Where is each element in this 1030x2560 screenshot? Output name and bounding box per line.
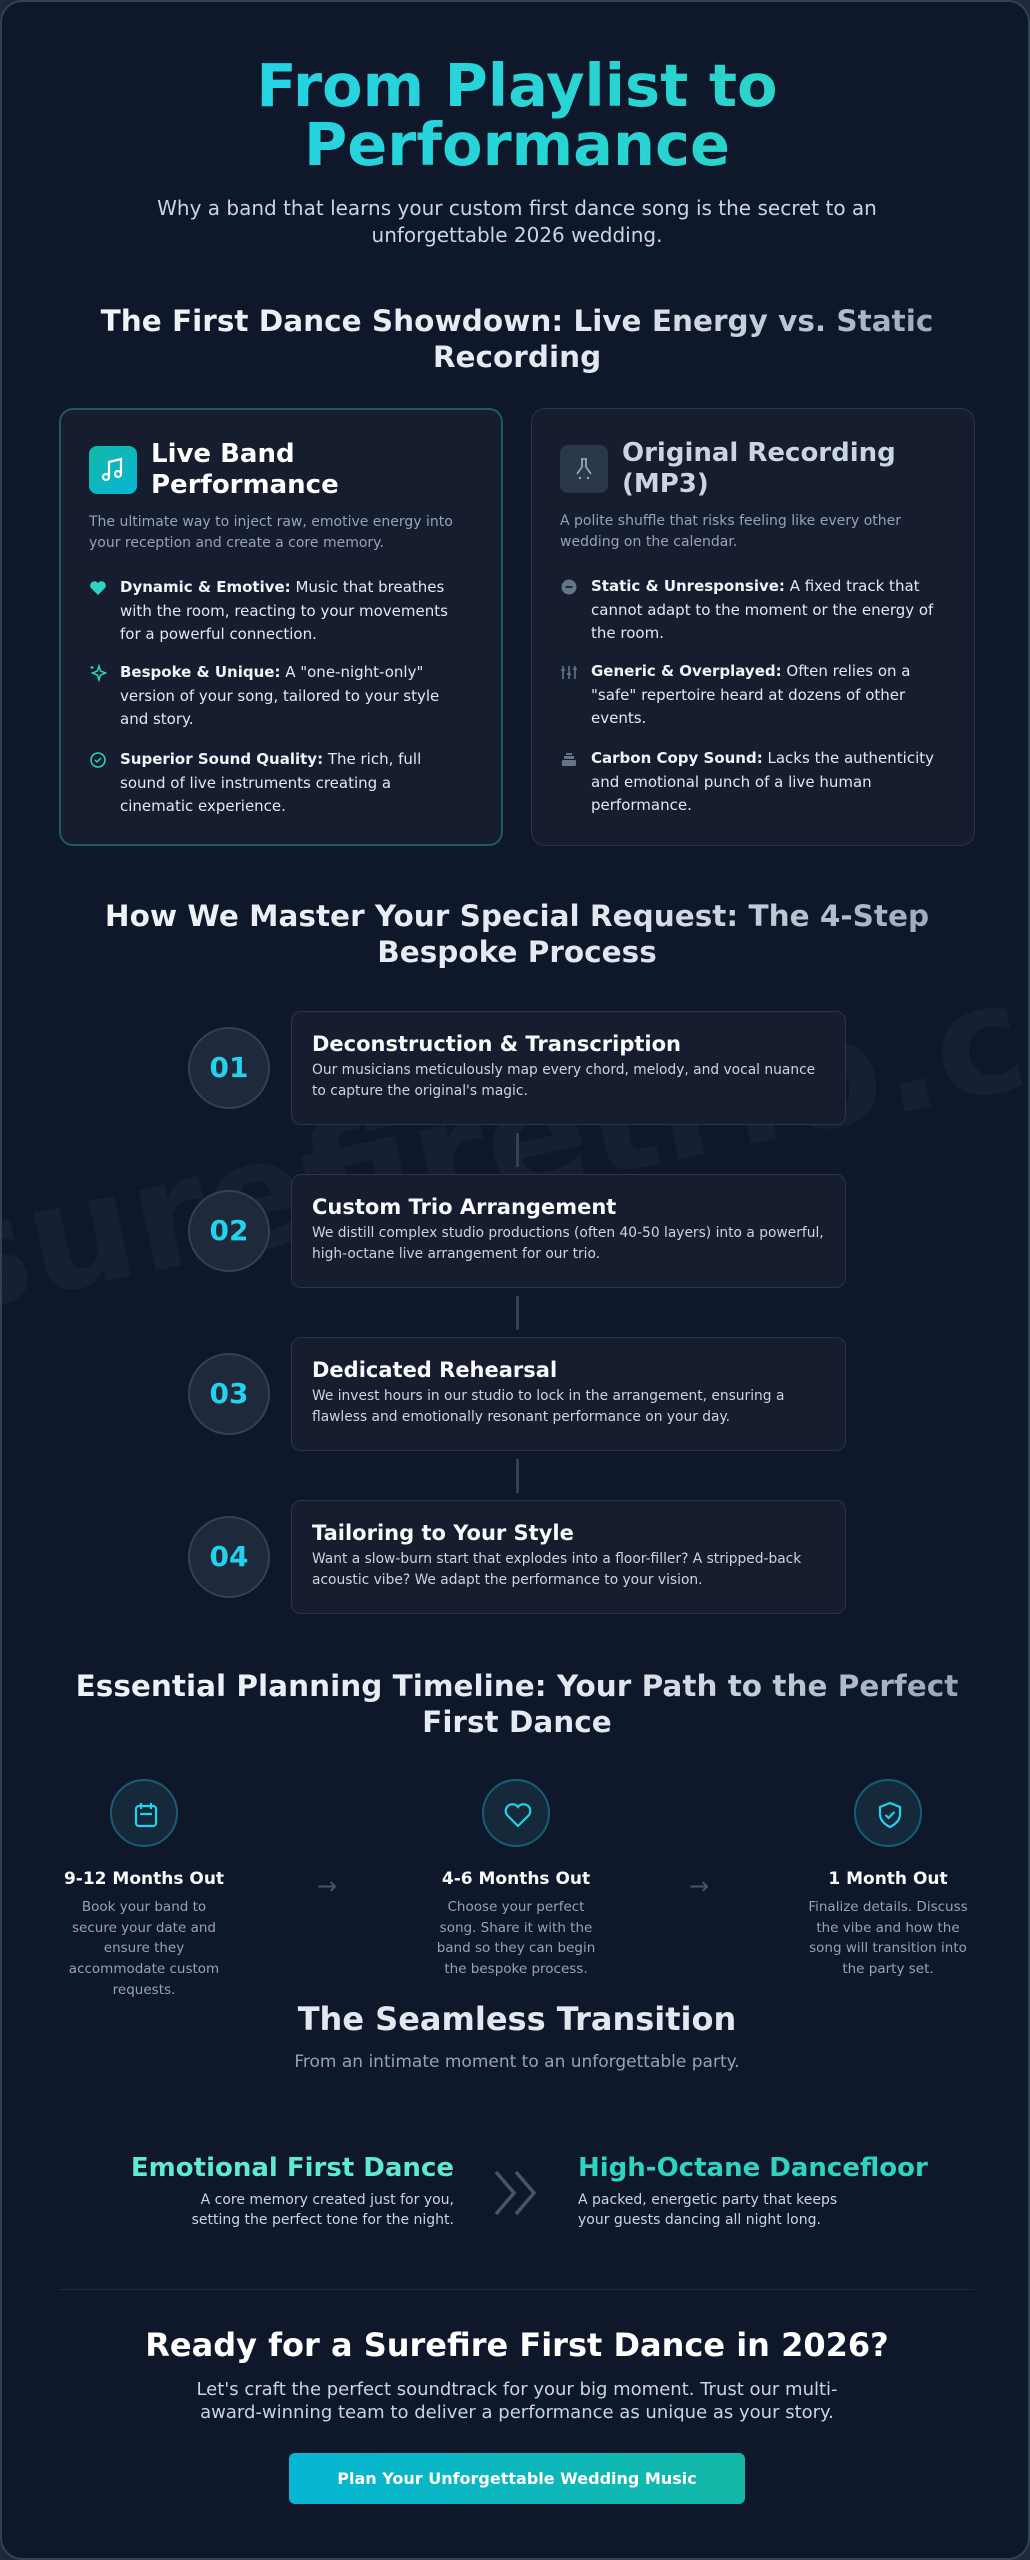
- icon: chevrons: [494, 2171, 536, 2215]
- bullet: dynamic: Dynamic & Emotive: Music that breathes with the room, reacting to your movements for a powerful connection.: [120, 578, 448, 643]
- step card: We distill complex studio productions (often 40-50 layers) into a powerful, high-octane live arrangement for our trio.: [312, 1225, 824, 1262]
- step card: [291, 1337, 846, 1451]
- timeline: 1 month: 1 Month Out: [828, 1869, 948, 1889]
- transition: emotional: [131, 2153, 454, 2228]
- panel: live band: [59, 408, 503, 846]
- timeline: 1 month: [808, 1779, 968, 1977]
- step card: [291, 1500, 846, 1614]
- subtitle: Why a band that learns your custom first dance song is the secret to an unforgettable 2026 wedding.: [157, 196, 877, 247]
- step 02: [188, 1174, 846, 1288]
- bullet: carbon copy: Carbon Copy Sound: Lacks the authenticity and emotional punch of a live human performance.: [591, 749, 934, 814]
- step card: Want a slow-burn start that explodes into a floor-filler? A stripped-back acoustic vibe? We adapt the performance to your vision.: [312, 1551, 801, 1588]
- step card: Custom Trio Arrangement: [312, 1195, 616, 1219]
- CTA button: Plan Your Unforgettable Wedding Music: [337, 2469, 697, 2488]
- step card: Tailoring to Your Style: [312, 1521, 574, 1545]
- step 01: [188, 1011, 846, 1125]
- bullet: generic: Generic & Overplayed: Often relies on a "safe" repertoire heard at dozens of other events.: [591, 662, 910, 727]
- subheading: From an intimate moment to an unforgettable party.: [294, 2052, 740, 2072]
- timeline: 4-6 months: [437, 1779, 595, 1977]
- transition: emotional: setting the perfect tone for the night.: [192, 2212, 454, 2228]
- number badge: [188, 1190, 270, 1272]
- step 04: [188, 1500, 846, 1614]
- step card: [291, 1174, 846, 1288]
- number badge: [188, 1353, 270, 1435]
- panel: original recording: [531, 408, 975, 846]
- CTA text: Let's craft the perfect soundtrack for your big moment. Trust our multi-award-winning team to deliver a performance as unique as your story.: [196, 2379, 838, 2423]
- title: Performance: [304, 110, 730, 179]
- card description: The ultimate way to inject raw, emotive energy into your reception and create a core memory.: [89, 514, 453, 551]
- step card: Deconstruction & Transcription: [312, 1032, 681, 1056]
- timeline: 4-6 months: 4-6 Months Out: [442, 1869, 590, 1889]
- step card: Our musicians meticulously map every chord, melody, and vocal nuance to capture the original's magic.: [312, 1062, 815, 1099]
- icon: recording: [560, 445, 608, 493]
- icon: calendar: [110, 1779, 178, 1847]
- timeline: 9-12 months: Book your band to secure your date and ensure they accommodate custom requests.: [69, 1899, 219, 1998]
- card title: Original Recording (MP3): [622, 438, 896, 499]
- number badge: 04: [210, 1540, 248, 1573]
- step card: Dedicated Rehearsal: [312, 1358, 557, 1382]
- CTA heading: Ready for a Surefire First Dance in 2026?: [145, 2326, 889, 2364]
- transition: dancefloor: your guests dancing all night long.: [578, 2212, 821, 2228]
- number badge: 03: [210, 1377, 248, 1410]
- card title: Live Band Performance: [151, 439, 339, 500]
- number badge: [188, 1516, 270, 1598]
- timeline: 1 month: Finalize details. Discuss the vibe and how the song will transition into the party set.: [808, 1899, 968, 1977]
- heading: seamless transition: The Seamless Transition: [298, 2000, 736, 2038]
- transition: dancefloor: High-Octane Dancefloor: [578, 2153, 928, 2183]
- step card: We invest hours in our studio to lock in the arrangement, ensuring a flawless and emotionally resonant performance on your day.: [312, 1388, 784, 1425]
- icon: heart: [482, 1779, 550, 1847]
- icon: shield: [854, 1779, 922, 1847]
- CTA button: [289, 2453, 745, 2504]
- heading: timeline: Essential Planning Timeline: Your Path to the Perfect First Dance: [76, 1669, 958, 1739]
- arrow: →: [689, 1872, 709, 1900]
- heading: showdown: The First Dance Showdown: Live Energy vs. Static Recording: [101, 304, 933, 374]
- number badge: 01: [210, 1051, 248, 1084]
- heading: process: How We Master Your Special Request: The 4-Step Bespoke Process: [105, 899, 929, 969]
- number badge: [188, 1027, 270, 1109]
- transition: emotional: A core memory created just for you,: [201, 2192, 454, 2208]
- step card: [291, 1011, 846, 1125]
- bullet: bespoke: Bespoke & Unique: A "one-night-only" version of your song, tailored to your style and story.: [120, 663, 439, 728]
- number badge: 02: [210, 1214, 248, 1247]
- card description: A polite shuffle that risks feeling like every other wedding on the calendar.: [560, 513, 901, 550]
- transition: dancefloor: [578, 2153, 928, 2228]
- title: From Playlist to: [256, 51, 778, 120]
- timeline: 4-6 months: Choose your perfect song. Share it with the band so they can begin the bespoke process.: [437, 1899, 595, 1977]
- arrow: →: [317, 1872, 337, 1900]
- timeline: 9-12 months: 9-12 Months Out: [64, 1869, 224, 1889]
- icon: music note: [89, 446, 137, 494]
- transition: emotional: Emotional First Dance: [131, 2153, 454, 2183]
- step 03: [188, 1337, 846, 1451]
- title: [2, 56, 1030, 174]
- transition: dancefloor: A packed, energetic party that keeps: [578, 2192, 837, 2208]
- bullet: sound quality: Superior Sound Quality: The rich, full sound of live instruments creating a cinematic experience.: [120, 750, 421, 815]
- timeline: 9-12 months: [64, 1779, 224, 1998]
- bullet: static: Static & Unresponsive: A fixed track that cannot adapt to the moment or the energy of the room.: [591, 577, 933, 642]
